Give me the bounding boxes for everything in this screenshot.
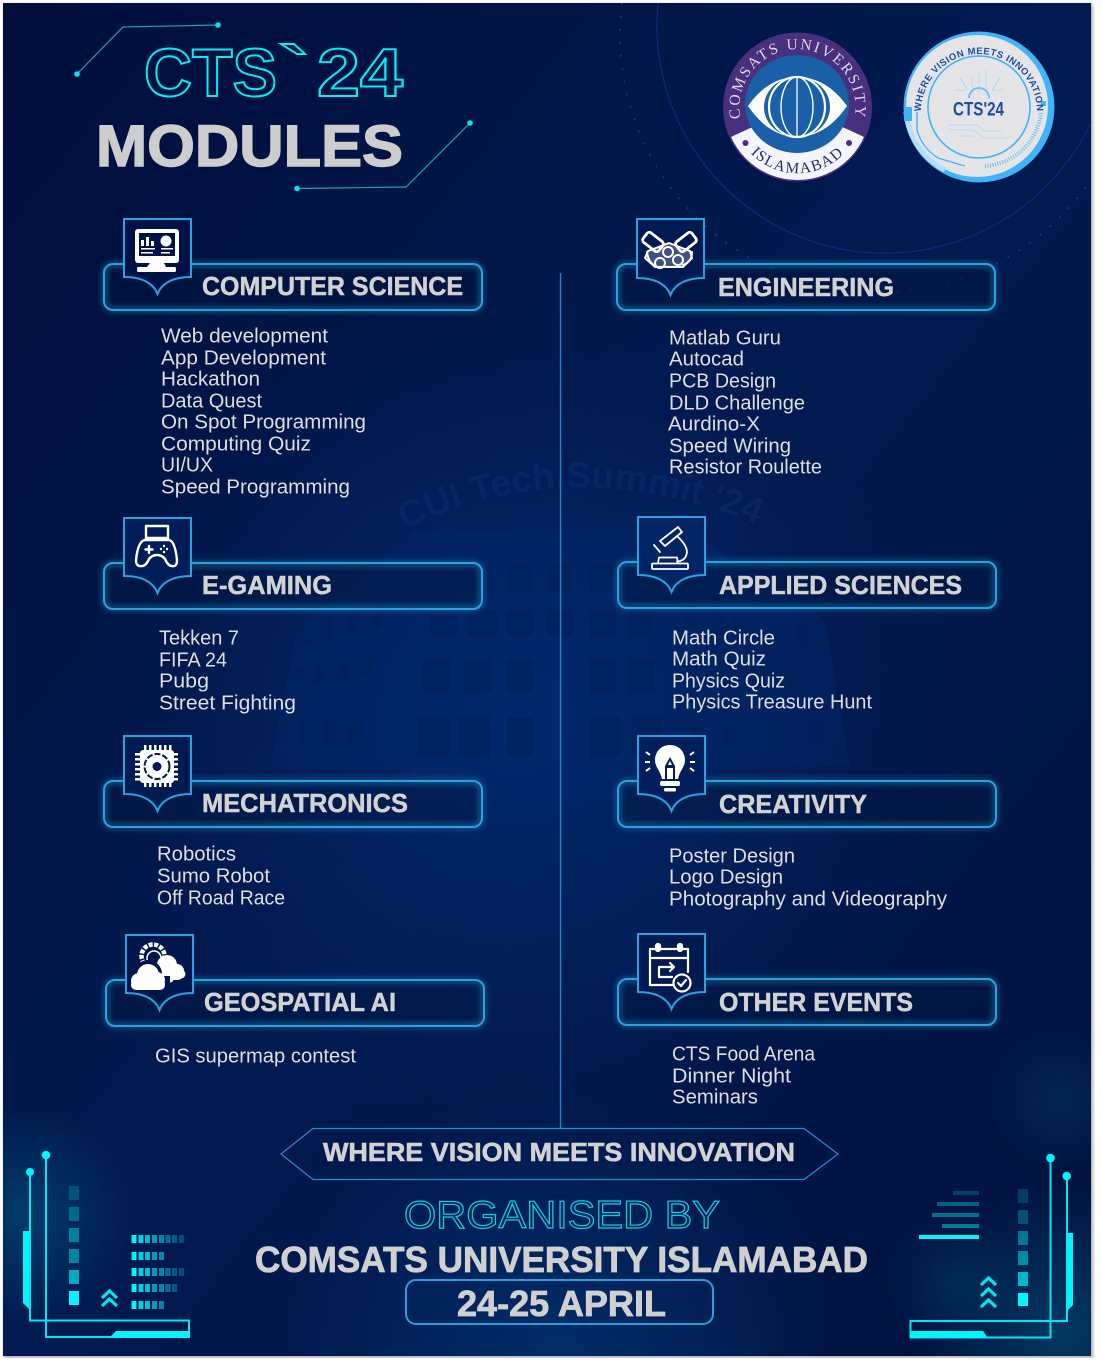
logo: CTS'24 badge: WHERE VISION MEETS INNOVATION: [914, 48, 1044, 111]
list: creativity modules: Photography and Videography: [669, 889, 947, 911]
logo: COMSATS University Islamabad: ISLAMABAD: [750, 146, 842, 174]
list: mechatronics modules: [157, 844, 285, 910]
list: engineering modules: Resistor Roulette: [669, 457, 822, 479]
logo: CTS'24 badge: [904, 32, 1054, 182]
panel: mechatronics: [104, 736, 482, 910]
date box: 24-25 APRIL: [457, 1283, 666, 1324]
watermark building: [400, 462, 850, 767]
icon: game controller: [136, 526, 177, 566]
list: computer science modules: Computing Quiz: [161, 434, 311, 456]
list: engineering modules: PCB Design: [669, 371, 776, 393]
panel: other events: [618, 934, 996, 1109]
heading: e-gaming: [104, 518, 482, 609]
list: computer science modules: UI/UX: [161, 455, 213, 477]
title: CTS`24: 24: [317, 35, 403, 111]
center divider: [560, 273, 562, 1128]
icon: calendar: [650, 944, 690, 992]
list: other events: [672, 1044, 816, 1109]
list: other events: Dinner Night: [672, 1066, 791, 1088]
list: creativity modules: Poster Design: [669, 846, 795, 868]
heading: geospatial ai: [106, 935, 484, 1026]
list: engineering modules: Aurdino-X: [668, 414, 760, 436]
list: e-gaming modules: [159, 628, 296, 715]
list: applied sciences modules: Physics Treasure Hunt: [672, 692, 872, 714]
heading: other events: OTHER EVENTS: [719, 987, 913, 1017]
list: applied sciences modules: [672, 628, 872, 714]
tagline banner: [281, 1128, 838, 1180]
heading: e-gaming: E-GAMING: [202, 570, 332, 600]
decoration: bottom left circuit: [23, 1151, 190, 1338]
heading: applied sciences: APPLIED SCIENCES: [719, 570, 962, 600]
list: engineering modules: Matlab Guru: [669, 328, 781, 350]
title: CTS`24: CTS: [144, 35, 277, 111]
title: CTS`24: [144, 35, 403, 111]
list: computer science modules: Data Quest: [161, 391, 262, 413]
list: e-gaming modules: Pubg: [159, 671, 209, 693]
icon: monitor: [135, 229, 179, 272]
list: geospatial modules: GIS supermap contest: [155, 1046, 356, 1068]
list: computer science modules: [161, 326, 366, 499]
watermark building: CUI Tech Summit '24: [400, 462, 763, 526]
list: engineering modules: Autocad: [669, 349, 744, 371]
heading: mechatronics: [104, 736, 482, 827]
list: other events: CTS Food Arena: [672, 1044, 816, 1066]
list: engineering modules: DLD Challenge: [669, 393, 805, 415]
date box: [406, 1280, 713, 1324]
icon: microscope: [652, 527, 688, 569]
panel: geospatial ai: [106, 935, 484, 1068]
list: engineering modules: Speed Wiring: [669, 436, 791, 458]
logo: COMSATS University Islamabad: COMSATS UNIVERSITY: [729, 38, 866, 118]
list: mechatronics modules: Off Road Race: [157, 888, 285, 910]
list: creativity modules: Logo Design: [669, 867, 783, 889]
list: creativity modules: [669, 846, 947, 911]
panel: applied sciences: [618, 517, 996, 714]
list: mechatronics modules: Robotics: [157, 844, 236, 866]
heading: engineering: [617, 219, 995, 310]
heading: creativity: [618, 736, 996, 827]
list: e-gaming modules: FIFA 24: [159, 650, 227, 672]
list: other events: Seminars: [672, 1087, 758, 1109]
icon: sun and clouds: [131, 944, 186, 992]
icon: engine: [641, 231, 698, 268]
heading: computer science: COMPUTER SCIENCE: [202, 271, 463, 301]
heading: other events: [618, 934, 996, 1025]
heading: creativity: CREATIVITY: [719, 789, 867, 819]
heading: mechatronics: MECHATRONICS: [202, 788, 408, 818]
panel: computer science: [104, 219, 482, 499]
heading: engineering: ENGINEERING: [718, 272, 894, 302]
list: computer science modules: Web development: [161, 326, 328, 348]
panel: e-gaming: [104, 518, 482, 715]
list: engineering modules: [668, 328, 822, 479]
list: computer science modules: App Development: [161, 348, 326, 370]
heading: computer science: [104, 219, 482, 310]
icon: chip with gear: [135, 745, 178, 787]
list: e-gaming modules: Tekken 7: [159, 628, 239, 650]
heading: applied sciences: [618, 517, 996, 608]
list: applied sciences modules: Math Circle: [672, 628, 775, 650]
heading: organised by: ORGANISED BY: [404, 1194, 720, 1237]
panel: creativity: [618, 736, 996, 911]
list: mechatronics modules: Sumo Robot: [157, 866, 270, 888]
list: computer science modules: Speed Programming: [161, 477, 350, 499]
icon: light bulb with pencil: [645, 745, 695, 792]
upper right arcs: [620, 3, 1091, 292]
list: applied sciences modules: Math Quiz: [672, 649, 766, 671]
logo: CTS'24 badge: CTS'24: [953, 100, 1004, 120]
heading: comsats university islamabad: COMSATS UNIVERSITY ISLAMABAD: [255, 1239, 868, 1280]
title: MODULES: MODULES: [96, 114, 403, 179]
list: e-gaming modules: Street Fighting: [159, 693, 296, 715]
heading: geospatial ai: GEOSPATIAL AI: [204, 987, 396, 1017]
title decoration lines: [74, 22, 473, 191]
list: applied sciences modules: Physics Quiz: [672, 671, 785, 693]
tagline banner: WHERE VISION MEETS INNOVATION: [323, 1137, 795, 1167]
decoration: bottom right circuit: [910, 1154, 1073, 1338]
logo: COMSATS University Islamabad: [723, 32, 872, 182]
list: computer science modules: Hackathon: [161, 369, 260, 391]
list: computer science modules: On Spot Programming: [161, 412, 366, 434]
panel: engineering: [617, 219, 995, 479]
